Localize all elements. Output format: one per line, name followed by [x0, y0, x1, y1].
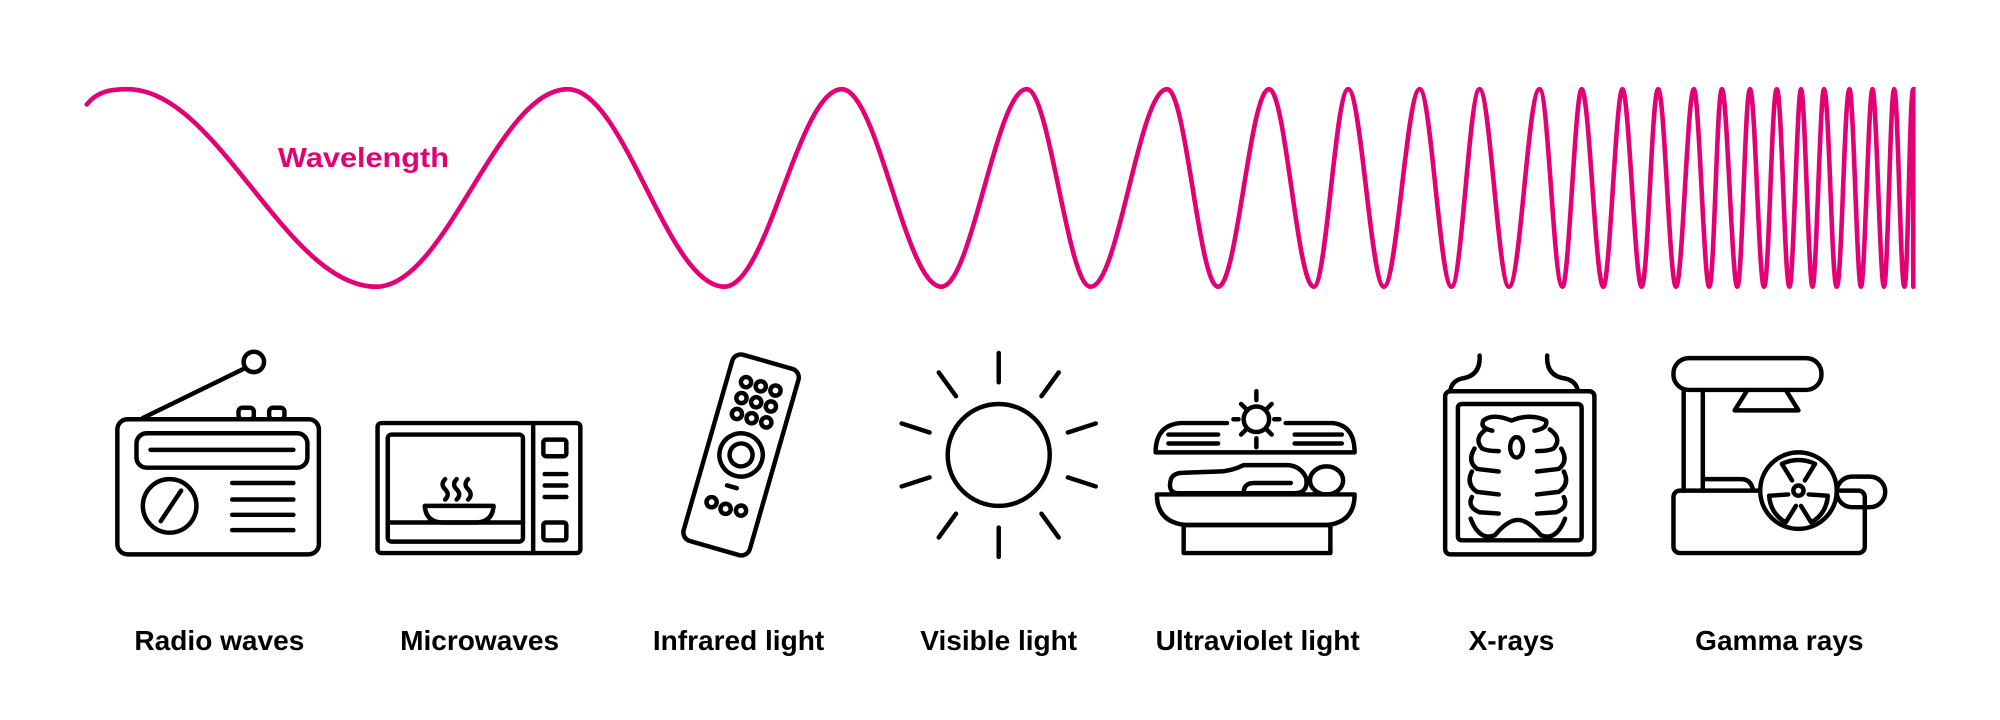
- icon: tanning bed: [1156, 391, 1355, 553]
- labels: Microwaves: [400, 625, 559, 656]
- icon: sun: [902, 353, 1096, 557]
- labels: Ultraviolet light: [1156, 625, 1360, 656]
- wave: [87, 89, 1913, 287]
- labels: X-rays: [1469, 625, 1554, 656]
- icon: remote: [681, 352, 801, 558]
- labels: Infrared light: [653, 625, 824, 656]
- icon: gamma machine: [1673, 358, 1885, 553]
- labels: Gamma rays: [1695, 625, 1864, 656]
- wavelength label: Wavelength: [278, 142, 449, 173]
- labels: Radio waves: [134, 625, 304, 656]
- labels: Visible light: [920, 625, 1077, 656]
- icon: x-ray: [1445, 356, 1594, 554]
- labels: [134, 625, 1864, 656]
- icon: microwave: [378, 423, 580, 553]
- icon: radio: [117, 352, 319, 554]
